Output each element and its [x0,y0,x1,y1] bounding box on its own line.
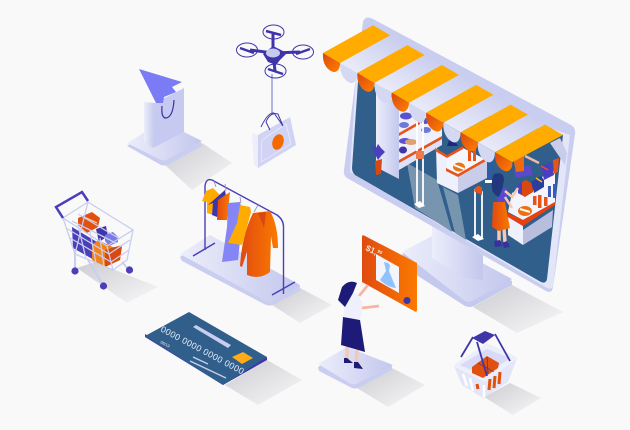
button icon [404,297,410,304]
potted plant [371,144,385,175]
hangers [214,181,258,212]
pedestal [127,134,202,166]
price card held by woman [362,235,417,312]
chip [232,352,253,364]
platform [180,237,300,306]
awning stripes white [340,35,407,73]
yellow dress [228,205,251,245]
monitor frame [344,18,575,292]
cart handle [56,192,88,218]
card lines [190,357,226,378]
hanging bag [252,133,258,168]
hair [338,282,357,307]
awning [323,25,567,171]
navy top [208,190,226,217]
awning scallops lavender [340,63,357,83]
display table front with gifts [508,158,559,245]
clothes rack on platform [180,180,300,306]
product image [376,254,399,293]
wheels [71,267,79,275]
credit card [145,312,267,385]
card expiry: 08/19 [160,339,171,349]
goods in cart [72,227,107,265]
orange dress [217,192,230,220]
platform [318,349,392,388]
awning stripes orange [323,25,390,63]
arms [359,285,379,308]
shoe shelves [399,85,442,170]
blouse [343,293,363,320]
purple dress [222,202,243,262]
screen [352,82,563,283]
bag emblem [270,133,286,151]
shopping cart [56,192,133,290]
price: $1, [364,243,379,257]
stand neck [432,225,483,280]
drone body [236,25,314,78]
price: 99 [377,249,384,256]
basket interior [454,343,517,382]
security gate right [472,186,484,241]
cart frame legs [75,250,129,285]
basket body [454,358,517,398]
security gate left [414,120,425,208]
monitor [323,18,575,292]
display table back [435,135,487,193]
bag handle [162,100,174,118]
magnetic strip [193,325,231,348]
shopper woman [492,173,518,248]
light rays on floor [407,163,452,232]
delivery drone with bag [236,25,314,168]
wall column [376,90,399,179]
bag [144,102,155,148]
woman on platform [318,282,393,388]
shopper man [485,153,539,183]
parcel [472,356,499,378]
rope [271,74,273,114]
stand base [402,238,512,307]
card number: 0000 0000 0000 0000 [159,324,246,377]
shoes [344,358,363,369]
basket handle [461,334,510,376]
basket slats [477,372,500,390]
arrow cursor [139,69,182,103]
dress icon [380,262,396,288]
orange coat [240,211,278,277]
awning scallops orange [323,53,340,72]
shopping basket [454,331,517,398]
cart wire basket [63,202,133,270]
legs [347,347,357,363]
shadows [77,143,563,415]
monitor stand [402,225,512,307]
skirt [341,317,365,352]
yellow top [202,188,220,215]
shopping bag with arrow on pedestal [127,69,202,166]
rack frame [205,180,284,294]
